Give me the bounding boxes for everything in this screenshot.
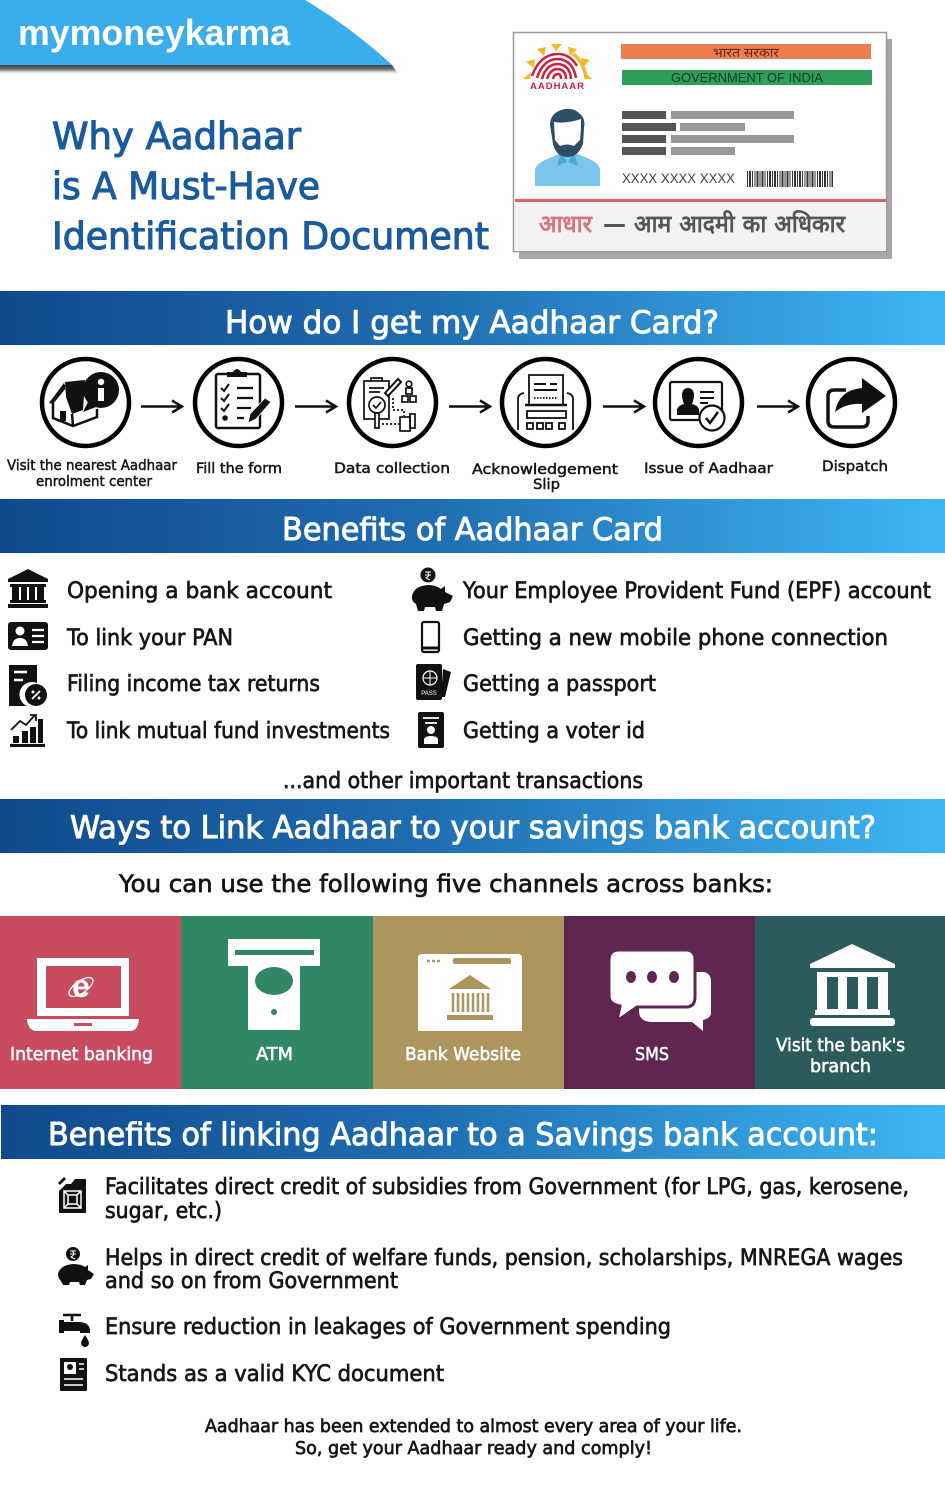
step 4: acknowledgement slip: Acknowledgement [472, 462, 618, 478]
benefit: mutual funds: To link mutual fund investments [66, 719, 390, 744]
section header: benefits [0, 499, 945, 553]
benefit: subsidies: sugar, etc.) [105, 1199, 222, 1224]
linking benefits list [58, 1175, 909, 1391]
tile: visit branch [755, 916, 945, 1089]
benefit: PAN [8, 622, 233, 651]
benefit: reduce leakages: Ensure reduction in leakages of Government spending [105, 1315, 671, 1340]
step 2: fill the form [195, 359, 282, 477]
benefit: tax returns [9, 665, 320, 706]
closing note [205, 1416, 742, 1459]
closing note: So, get your Aadhaar ready and comply! [295, 1438, 652, 1459]
step 5: issue of aadhaar: Issue of Aadhaar [644, 461, 773, 477]
logo banner [0, 0, 399, 75]
benefit: passport: PASS [421, 691, 437, 697]
icon: aadhaar logo [523, 44, 592, 92]
step 1: visit enrolment center: enrolment center [36, 474, 152, 490]
benefit: voter id [418, 712, 645, 748]
benefit: bank account: Opening a bank account [67, 579, 332, 604]
hindi tagline: — आम आदमी का अधिकार [603, 210, 846, 238]
step 3: data collection: Data collection [334, 461, 450, 477]
benefit: subsidies: Facilitates direct credit of subsidies from Government (for LPG, gas, kerosene, [105, 1175, 909, 1200]
green government bar [622, 70, 872, 85]
hindi tagline: आधार [539, 210, 593, 238]
tile: SMS [564, 916, 755, 1089]
icon: person [535, 109, 600, 186]
benefit: EPF [412, 568, 931, 611]
arrow [603, 400, 644, 412]
arrow [295, 400, 336, 412]
orange government bar [621, 44, 871, 60]
tile: SMS: SMS [635, 1044, 669, 1065]
step 1: visit enrolment center [7, 359, 177, 490]
section header: how to get card: How do I get my Aadhaar Card? [225, 305, 719, 341]
section header: ways to link [0, 799, 945, 853]
benefit: tax returns: Filing income tax returns [67, 672, 320, 697]
benefit: reduce leakages [59, 1315, 671, 1347]
section header: benefits of linking: Benefits of linking Aadhaar to a Savings bank account: [48, 1117, 878, 1153]
benefit: mobile: Getting a new mobile phone connection [463, 626, 888, 651]
channel tiles [0, 916, 945, 1089]
benefit: welfare funds: Helps in direct credit of welfare funds, pension, scholarships, MNREGA wages [105, 1246, 903, 1271]
title: Identification Document [52, 215, 489, 258]
benefit: welfare funds: and so on from Government [105, 1269, 398, 1294]
step 3: data collection [334, 359, 450, 477]
benefit: bank account [8, 569, 332, 608]
closing note: Aadhaar has been extended to almost every area of your life. [205, 1416, 742, 1437]
benefit: mutual funds [10, 715, 390, 747]
title: Why Aadhaar [52, 115, 302, 158]
logo banner: mymoneykarma [18, 12, 291, 53]
title [52, 115, 489, 258]
aadhaar card illustration [514, 32, 892, 259]
benefit: welfare funds [58, 1246, 903, 1294]
benefit: KYC: Stands as a valid KYC document [105, 1362, 444, 1387]
arrow [449, 400, 490, 412]
tile: internet banking: e [72, 968, 90, 1004]
tile: bank website [373, 916, 564, 1089]
benefit: PAN: To link your PAN [66, 626, 233, 651]
step 5: issue of aadhaar [644, 359, 773, 477]
step 4: acknowledgement slip [472, 359, 618, 493]
tile: ATM: ATM [256, 1044, 293, 1065]
process steps [7, 359, 895, 493]
green government bar: GOVERNMENT OF INDIA [671, 71, 824, 85]
benefit: passport: Getting a passport [463, 672, 656, 697]
tile: visit branch: branch [810, 1056, 871, 1077]
tile: visit branch: Visit the bank's [776, 1035, 905, 1056]
arrow [141, 400, 182, 412]
orange government bar: भारत सरकार [713, 45, 780, 60]
section header: benefits of linking [1, 1105, 945, 1159]
tile: internet banking [0, 916, 181, 1089]
channels intro: You can use the following five channels across banks: [118, 870, 773, 898]
benefit: passport [416, 664, 656, 700]
benefits list [8, 568, 931, 794]
title: is A Must-Have [52, 165, 320, 208]
aadhaar number: XXXX XXXX XXXX [622, 170, 736, 186]
tile: internet banking: Internet banking [10, 1044, 153, 1065]
id detail bars [622, 111, 794, 155]
step 6: dispatch [808, 359, 895, 475]
benefit: KYC [60, 1358, 444, 1391]
icon: aadhaar logo: AADHAAR [530, 81, 584, 92]
tile: bank website: Bank Website [405, 1044, 521, 1065]
benefit: EPF: Your Employee Provident Fund (EPF) account [462, 579, 931, 604]
section header: how to get card [0, 291, 945, 345]
benefit: voter id: Getting a voter id [463, 719, 645, 744]
step 1: visit enrolment center: Visit the nearest Aadhaar [7, 458, 177, 474]
barcode [747, 171, 833, 187]
step 6: dispatch: Dispatch [822, 459, 888, 475]
step 4: acknowledgement slip: Slip [533, 477, 560, 493]
tile: ATM [181, 916, 373, 1089]
arrow [757, 400, 798, 412]
benefit: subsidies [58, 1175, 909, 1224]
step 2: fill the form: Fill the form [196, 461, 282, 477]
section header: benefits: Benefits of Aadhaar Card [282, 512, 663, 548]
other transactions note: ...and other important transactions [283, 769, 643, 794]
section header: ways to link: Ways to Link Aadhaar to your savings bank account? [70, 810, 876, 846]
